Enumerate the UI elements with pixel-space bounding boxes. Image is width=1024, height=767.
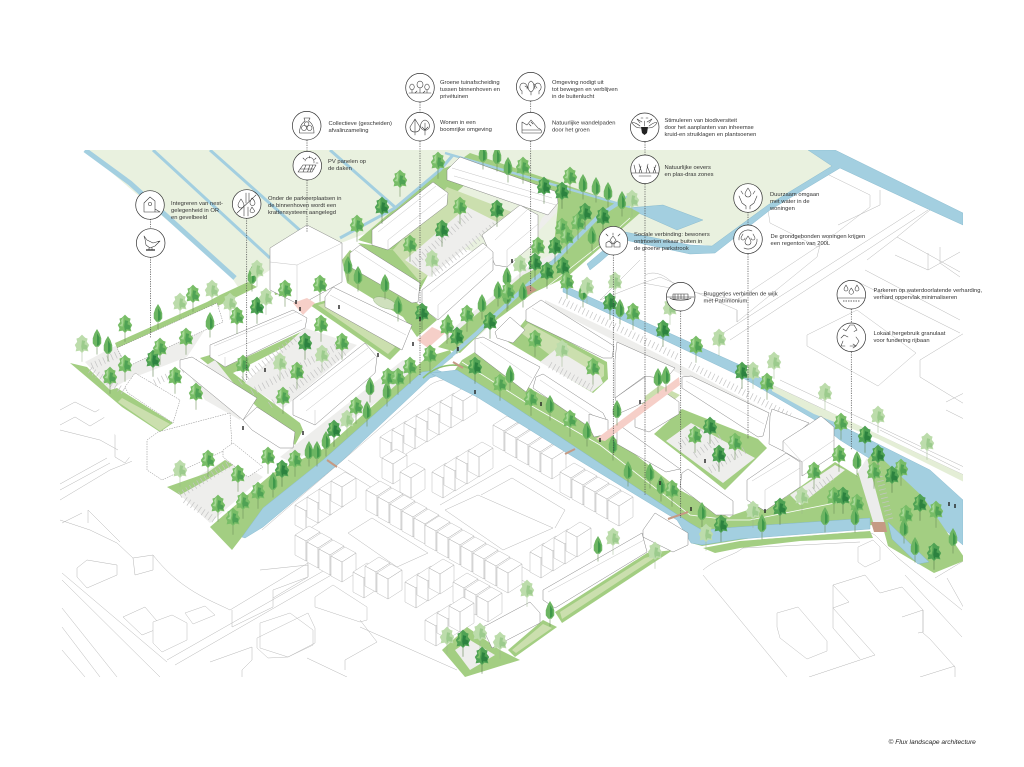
icon: water cycle drops xyxy=(734,225,762,254)
context buildings and streets, west xyxy=(60,380,570,677)
text: pv panelen xyxy=(328,159,366,172)
text: lokaal hergebruik xyxy=(874,331,946,344)
text: stimuleren biodiversiteit xyxy=(664,118,756,138)
icon: hands holding water xyxy=(734,184,762,212)
text: onder de parkeerplaatsen: de binnenhoven wordt een xyxy=(268,203,336,209)
text: natuurlijke wandelpaden: door het groen xyxy=(552,128,590,134)
text: collectieve afvalinzameling: Collectieve (gescheiden) xyxy=(328,121,392,127)
text: de grondgebonden woningen xyxy=(770,234,865,247)
text: onder de parkeerplaatsen xyxy=(268,196,341,216)
text: groene tuinafscheiding: privétuinen xyxy=(440,94,468,100)
text: bruggetjes: Bruggetjes verbinden de wijk xyxy=(704,292,778,298)
text: groene tuinafscheiding: tussen binnenhoven en xyxy=(440,87,500,93)
icon: two trees xyxy=(406,112,434,141)
text: stimuleren biodiversiteit: kruid-en struiklagen en plantsoenen xyxy=(664,132,756,138)
south quarter row houses xyxy=(295,386,633,646)
pink squares and pedestrian paths xyxy=(293,298,680,441)
icon: solar panels xyxy=(293,151,322,180)
text: wonen: boomrijke omgeving xyxy=(440,127,492,133)
text: pv panelen: de daken xyxy=(328,166,352,172)
text: omgeving nodigt uit: tot bewegen en verblijven xyxy=(552,87,618,93)
icon: small bridge xyxy=(666,282,695,311)
text: duurzaam omgaan: met water in de xyxy=(770,199,810,205)
canals xyxy=(563,150,963,545)
text: natuurlijke oevers xyxy=(664,165,714,178)
text: parkeren: Parkeren op waterdoorlatende verharding, xyxy=(874,288,982,294)
text: pv panelen: PV panelen op xyxy=(328,159,366,165)
text: stimuleren biodiversiteit: Stimuleren van biodiversiteit xyxy=(664,118,737,124)
trees xyxy=(75,144,957,674)
green base: east site xyxy=(423,300,966,573)
pale green polder field xyxy=(85,150,832,290)
text: bruggetjes: met Patrimonium xyxy=(704,298,747,304)
text: parkeren: verhard oppervlak minimaliseren xyxy=(874,295,957,301)
housing blocks xyxy=(117,157,834,648)
text: omgeving nodigt uit: in de buitenlucht xyxy=(552,94,595,100)
icon: house with bird box xyxy=(136,191,164,219)
text: natuurlijke wandelpaden: Natuurlijke wandelpaden xyxy=(552,121,616,127)
text: bruggetjes xyxy=(704,292,778,304)
text: duurzaam omgaan: woningen xyxy=(769,206,795,212)
icon: forest with paths xyxy=(516,72,545,101)
icon: three trees hedge xyxy=(406,73,434,102)
text: parkeren xyxy=(874,288,982,301)
dashed leader lines xyxy=(150,101,851,518)
copyright credit: © Flux landscape architecture xyxy=(888,738,976,746)
text: duurzaam omgaan xyxy=(769,192,819,212)
text: sociale verbinding: Sociale verbinding: bewoners xyxy=(634,232,710,238)
text: integreren: Integreren van nest- xyxy=(171,201,223,207)
text: omgeving nodigt uit xyxy=(552,80,618,100)
text: sociale verbinding: ontmoeten elkaar buiten in xyxy=(634,239,702,245)
text: omgeving nodigt uit: Omgeving nodigt uit xyxy=(552,80,604,86)
green base: west site xyxy=(70,262,453,550)
text: integreren xyxy=(171,201,223,221)
text: onder de parkeerplaatsen: krattensysteem aangelegd xyxy=(268,210,336,216)
text: collectieve afvalinzameling: afvalinzameling xyxy=(328,128,368,134)
text: integreren: gelegenheid in OR xyxy=(171,208,219,214)
people figures xyxy=(242,259,956,513)
text: lokaal hergebruik: Lokaal hergebruik granulaat xyxy=(874,331,946,337)
pale bank along east canal xyxy=(772,385,966,483)
text: natuurlijke oevers: Natuurlijke oevers xyxy=(664,165,711,171)
icon: bee xyxy=(630,113,659,142)
small timber bridges xyxy=(327,285,688,519)
text: wonen: Wonen in een xyxy=(440,120,476,126)
text: de grondgebonden woningen: een regenton van 200L xyxy=(770,241,831,247)
text: natuurlijke wandelpaden xyxy=(552,121,616,134)
icon: reeds on water line xyxy=(631,155,659,184)
text: wonen xyxy=(440,120,492,133)
text: collectieve afvalinzameling xyxy=(328,121,392,134)
context buildings and streets, north-east and south-east xyxy=(600,173,966,677)
text: sociale verbinding xyxy=(634,232,710,252)
text: natuurlijke oevers: en plas-dras zones xyxy=(664,172,714,178)
polder ditches xyxy=(85,150,396,278)
green base: north site xyxy=(340,153,640,380)
icon: walking shoe xyxy=(516,112,545,141)
icon: people meeting xyxy=(599,226,628,255)
icon: recycling arrows xyxy=(837,323,866,352)
green base: south houses xyxy=(442,550,673,677)
text: groene tuinafscheiding xyxy=(440,80,500,100)
icon: waste bag xyxy=(292,111,321,140)
text: stimuleren biodiversiteit: door het aanplanten van inheemse xyxy=(664,125,754,131)
text: onder de parkeerplaatsen: Onder de parkeerplaatsen in xyxy=(268,196,341,202)
map: isometric neighbourhood plan xyxy=(60,144,966,677)
text: de grondgebonden woningen: De grondgebonden woningen krijgen xyxy=(770,234,865,240)
icon: permeable paving xyxy=(837,280,866,309)
text: sociale verbinding: de groene parkstrook xyxy=(634,246,689,252)
text: duurzaam omgaan: Duurzaam omgaan xyxy=(770,192,819,198)
text: integreren: en gevelbeeld xyxy=(171,215,207,221)
icon: water in gravel crate xyxy=(232,190,261,218)
text: groene tuinafscheiding: Groene tuinafscheiding xyxy=(440,80,500,86)
icon: bird xyxy=(136,229,165,257)
text: lokaal hergebruik: voor fundering rijbaan xyxy=(874,338,930,344)
